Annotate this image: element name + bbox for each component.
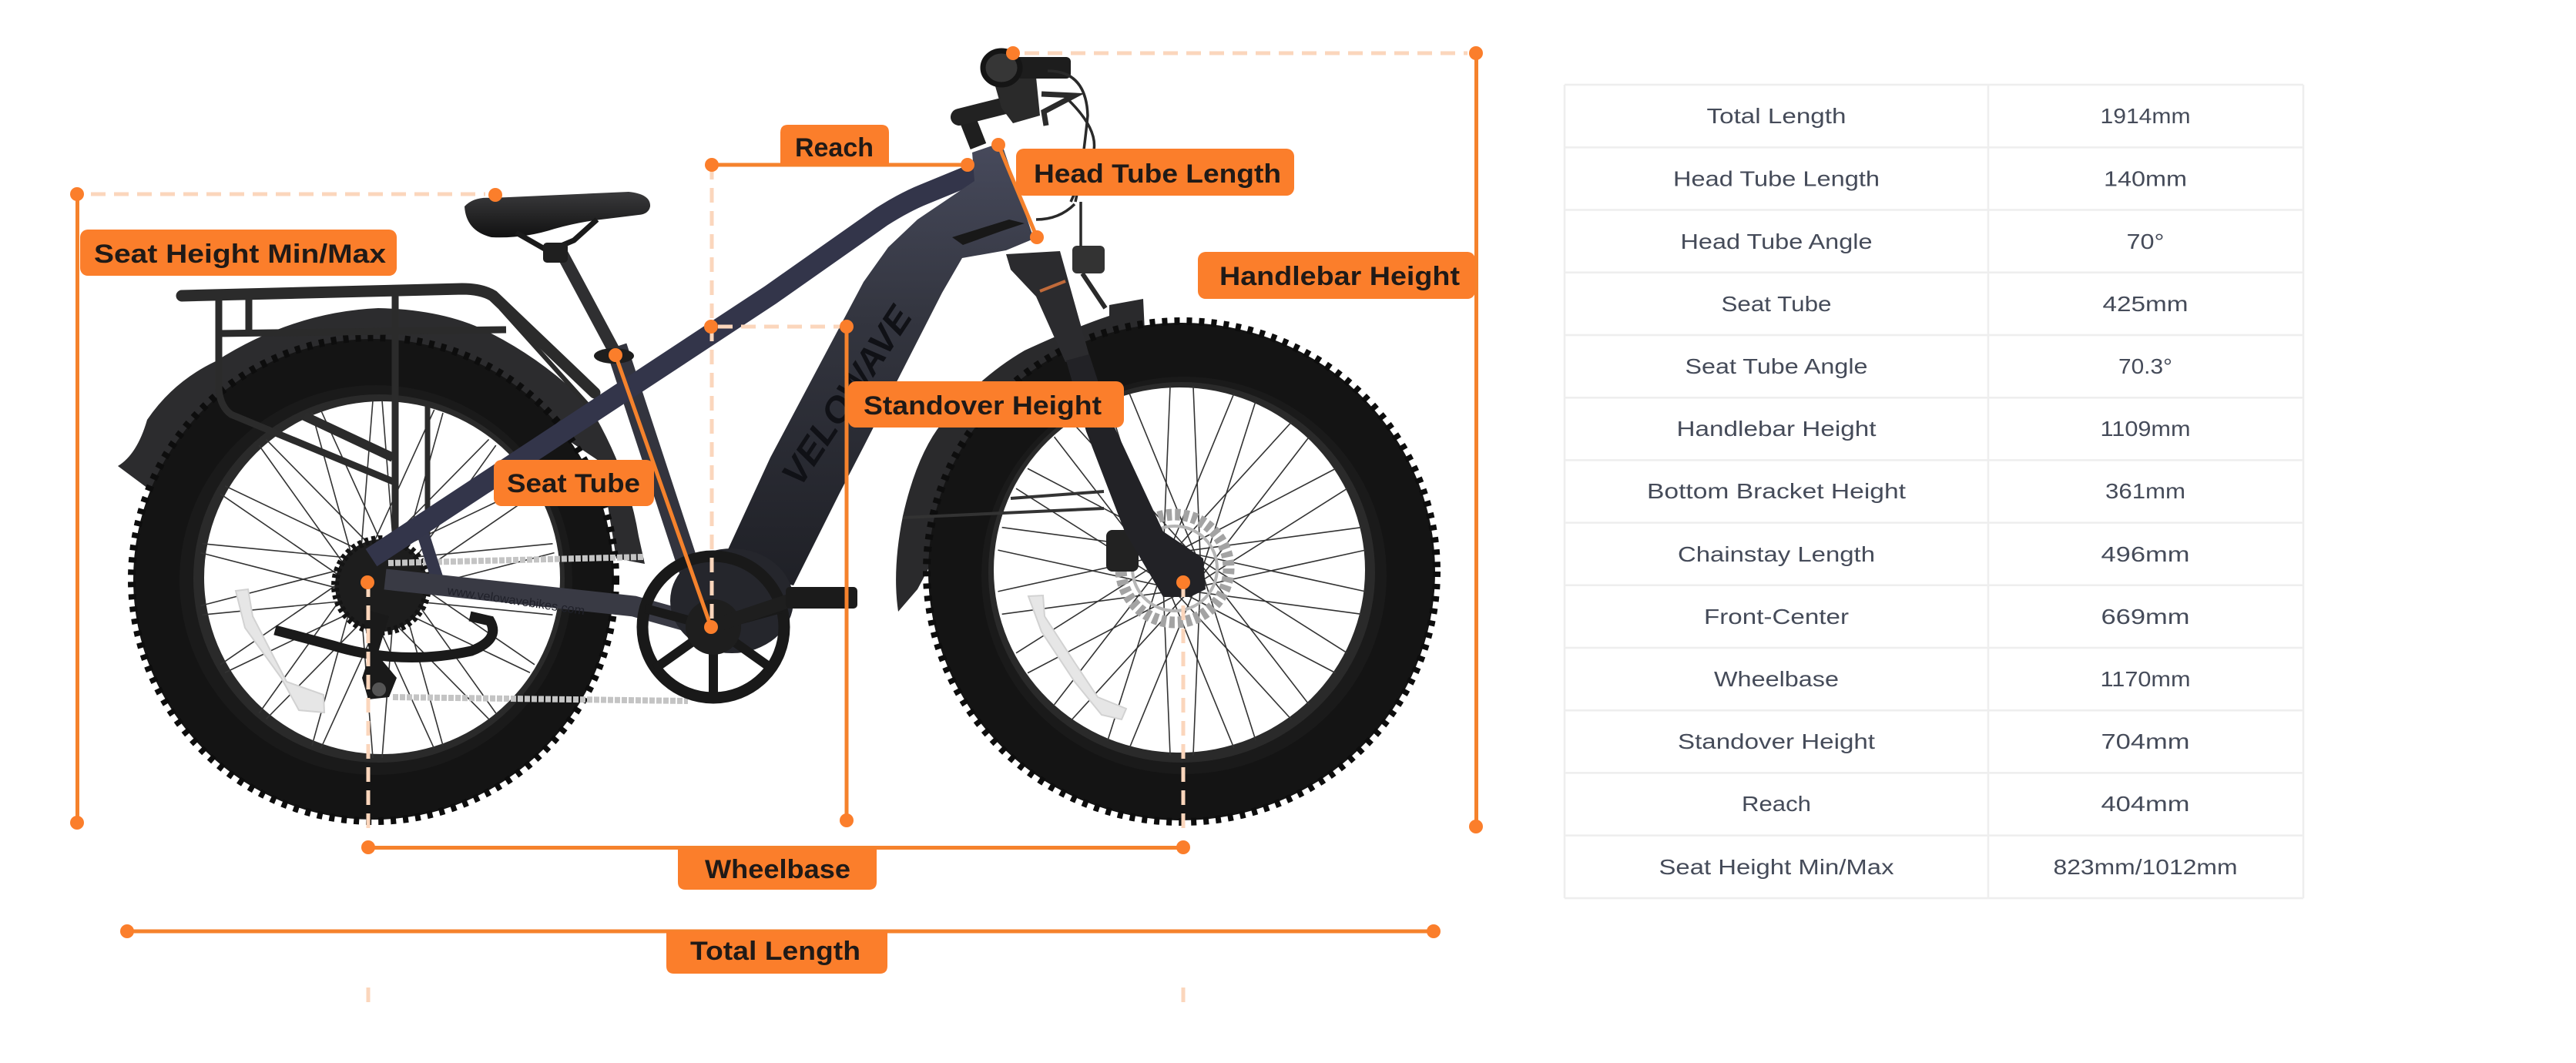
label: Seat Height Min/Max [80, 230, 397, 276]
handlebar and display [959, 51, 1095, 246]
rear wheel [132, 337, 615, 821]
row: Bottom Bracket Height: Bottom Bracket Height [1647, 479, 1906, 503]
row: Reach: 404mm [2101, 792, 2189, 816]
front rack struts [903, 491, 1104, 518]
row: Head Tube Length: Head Tube Length [1673, 166, 1880, 191]
total length dimension [120, 924, 1441, 938]
brake disc [1106, 515, 1229, 622]
row: Wheelbase: Wheelbase [1714, 667, 1839, 691]
row: Seat Tube: Seat Tube [1721, 292, 1832, 316]
front fender [896, 299, 1156, 612]
label: Seat Tube [494, 460, 654, 506]
frame [371, 143, 1034, 653]
reach dimension [705, 158, 974, 627]
saddle [465, 192, 650, 263]
seat tube dimension [609, 348, 718, 634]
row: Standover Height: Standover Height [1678, 729, 1875, 753]
brand lettering: VELOWAVE [773, 298, 921, 492]
row: Front-Center [1704, 605, 2189, 629]
label: Wheelbase [678, 849, 877, 890]
row: Total Length: Total Length [1707, 104, 1846, 128]
rear cassette and derailleur [335, 539, 428, 699]
row: Standover Height [1678, 729, 2189, 753]
label: Seat Height Min/Max: Seat Height Min/Max [94, 240, 386, 269]
front wheel [927, 321, 1437, 822]
label: Standover Height: Standover Height [864, 391, 1102, 421]
row: Seat Tube: 425mm [2103, 292, 2188, 316]
row: Chainstay Length: Chainstay Length [1678, 542, 1875, 566]
row: Bottom Bracket Height: 361mm [2105, 479, 2185, 503]
row: Chainstay Length [1678, 542, 2189, 566]
rear fender [118, 308, 645, 564]
headlight [1072, 246, 1105, 308]
label: Head Tube Length [1016, 149, 1294, 196]
row: Wheelbase: 1170mm [2100, 667, 2191, 691]
row: Bottom Bracket Height [1647, 479, 2185, 503]
row: Seat Height Min/Max [1659, 855, 2237, 879]
kickstand [275, 616, 493, 658]
website lettering: www.velowavebikes.com [446, 585, 585, 618]
row: Seat Tube Angle: 70.3° [2118, 354, 2172, 378]
row: Head Tube Angle: Head Tube Angle [1681, 230, 1872, 253]
row: Seat Height Min/Max: Seat Height Min/Max [1659, 855, 1893, 879]
row: Head Tube Length [1673, 166, 2187, 191]
row: Total Length [1707, 104, 2191, 128]
row: Total Length: 1914mm [2100, 104, 2191, 128]
row: Front-Center: Front-Center [1704, 605, 1849, 629]
label: Total Length [666, 931, 887, 974]
label: Handlebar Height: Handlebar Height [1219, 262, 1460, 291]
standover height dimension [704, 320, 854, 827]
row: Seat Tube Angle: Seat Tube Angle [1685, 354, 1867, 378]
row: Reach: Reach [1742, 792, 1811, 816]
row: Handlebar Height [1676, 417, 2191, 441]
row: Head Tube Length: 140mm [2104, 166, 2187, 191]
row: Wheelbase [1714, 667, 2191, 691]
rear rack [182, 289, 595, 539]
fork [1006, 251, 1206, 597]
label: Reach: Reach [795, 133, 874, 163]
row: Reach [1742, 792, 2189, 816]
row: Head Tube Angle: 70° [2126, 230, 2165, 253]
label: Head Tube Length: Head Tube Length [1034, 159, 1281, 189]
row: Standover Height: 704mm [2101, 729, 2189, 753]
bike illustration [118, 51, 1437, 822]
row: Front-Center: 669mm [2101, 605, 2189, 629]
row: Seat Tube [1721, 292, 2188, 316]
seat height dimension [70, 187, 502, 830]
row: Seat Height Min/Max: 823mm/1012mm [2054, 855, 2237, 879]
label: Standover Height [848, 381, 1124, 428]
specification table [1565, 85, 2303, 898]
label: Wheelbase: Wheelbase [705, 855, 850, 884]
handlebar height dimension [1006, 46, 1483, 833]
row: Chainstay Length: 496mm [2101, 542, 2189, 566]
label: Handlebar Height [1198, 252, 1475, 299]
head tube length dimension [991, 138, 1044, 244]
label: Reach [780, 125, 889, 165]
row: Handlebar Height: 1109mm [2100, 417, 2191, 441]
chain [388, 557, 688, 701]
row: Head Tube Angle [1681, 230, 2165, 253]
label: Total Length: Total Length [690, 937, 860, 966]
row: Seat Tube Angle [1685, 354, 2172, 378]
crankset [642, 556, 857, 698]
row: Handlebar Height: Handlebar Height [1676, 417, 1877, 441]
wheelbase dimension [361, 575, 1190, 1004]
label: Seat Tube: Seat Tube [507, 469, 640, 498]
